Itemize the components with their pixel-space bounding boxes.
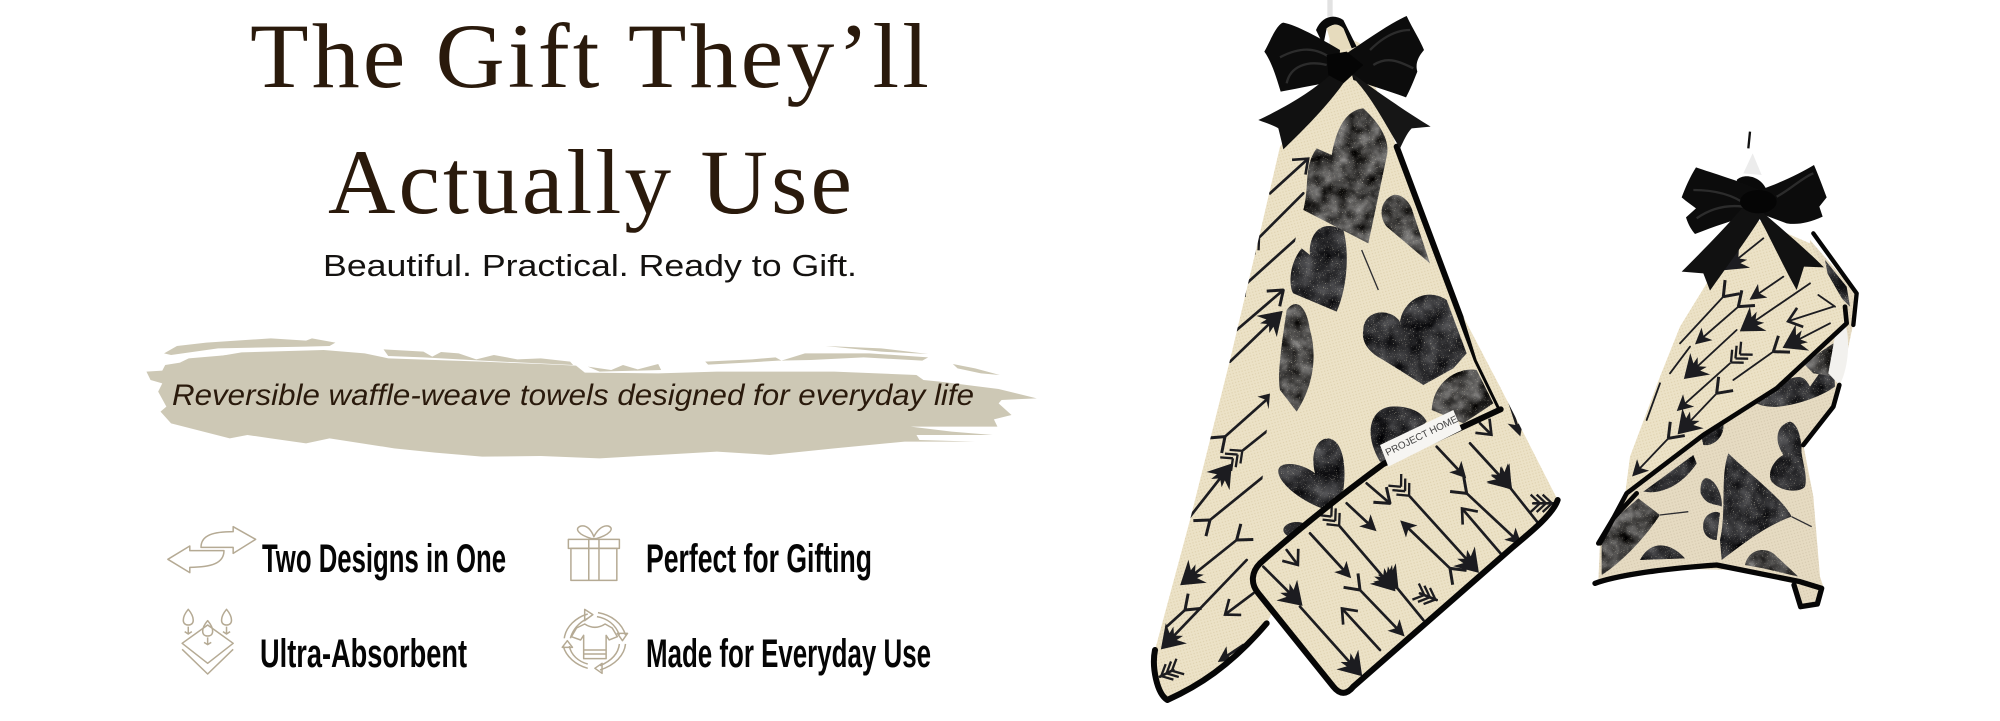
front panel with hearts <box>1257 28 1502 567</box>
icon: drops and layers <box>182 609 233 674</box>
care label: PROJECT HOME <box>1384 414 1460 459</box>
small towel with bow <box>1595 132 1857 607</box>
arrows <box>1637 238 1835 472</box>
feature: ultra-absorbent <box>182 609 467 676</box>
dark hearts <box>1640 260 1850 560</box>
label: Perfect for Gifting <box>646 537 872 581</box>
brush caption: Reversible waffle-weave towels designed for everyday life <box>172 379 974 412</box>
label: Ultra-Absorbent <box>260 632 467 676</box>
icon: swap arrows <box>168 527 256 573</box>
black satin bow <box>1258 16 1431 149</box>
label: Made for Everyday Use <box>646 632 931 676</box>
front fold with arrows <box>1253 317 1558 693</box>
front panel with arrows <box>1600 220 1847 543</box>
heart stem <box>1362 250 1378 290</box>
icon: shirt in cycle arrows <box>562 609 628 673</box>
hanger loop <box>1327 0 1333 17</box>
title <box>250 5 932 233</box>
back panel with hearts <box>1595 233 1857 607</box>
feature: two designs in one <box>168 527 506 581</box>
back panel with arrows <box>1154 83 1330 700</box>
feature: made for everyday use <box>562 609 931 676</box>
black satin bow <box>1682 165 1827 291</box>
label: Two Designs in One <box>262 537 506 581</box>
brush shape <box>146 338 1037 458</box>
title: Actually Use <box>328 131 855 233</box>
arrows on back panel <box>1160 160 1307 677</box>
title: The Gift They’ll <box>250 5 932 107</box>
arrows on front fold <box>1263 357 1553 670</box>
subtitle: Beautiful. Practical. Ready to Gift. <box>323 248 857 283</box>
dark hearts <box>1278 226 1467 538</box>
feature: perfect for gifting <box>568 526 872 581</box>
brush stroke banner <box>146 338 1037 458</box>
gray hearts <box>1602 343 1835 577</box>
heart stems <box>1660 512 1812 527</box>
hanger hook <box>1748 132 1750 148</box>
gray hearts <box>1279 108 1493 423</box>
icon: gift box <box>568 526 619 580</box>
large towel with bow <box>1154 0 1558 700</box>
tag behind panel <box>1828 323 1848 385</box>
